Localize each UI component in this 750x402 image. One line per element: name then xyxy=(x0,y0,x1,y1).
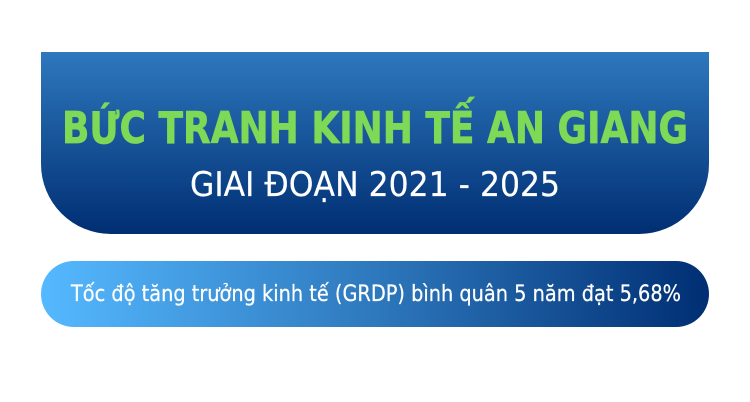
subtitle: GIAI ĐOẠN 2021 - 2025 xyxy=(190,165,560,205)
pill background xyxy=(41,261,709,327)
header background xyxy=(41,52,709,234)
panel: growth rate xyxy=(41,261,709,327)
panel: header xyxy=(41,52,709,234)
growth rate text: Tốc độ tăng trưởng kinh tế (GRDP) bình quân 5 năm đạt 5,68% xyxy=(70,282,681,307)
